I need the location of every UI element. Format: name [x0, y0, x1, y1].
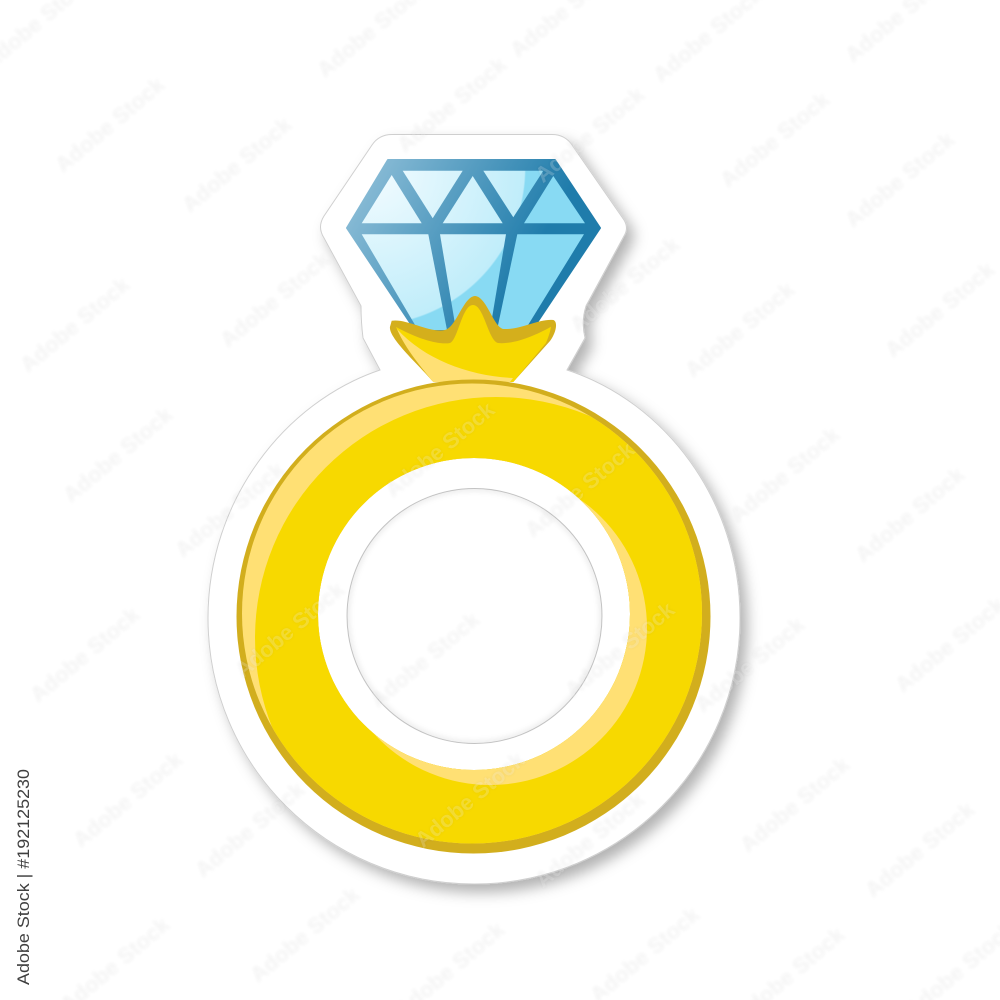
watermarks: Adobe Stock [850, 462, 969, 567]
watermarks: Adobe Stock [170, 457, 289, 562]
diamond outline [347, 160, 600, 330]
watermarks: Adobe Stock [680, 277, 799, 382]
watermarks: Adobe Stock [715, 87, 834, 192]
watermarks: Adobe Stock [15, 272, 134, 377]
watermarks: Adobe Stock [190, 777, 309, 882]
gold ring band [236, 380, 710, 854]
watermarks: Adobe Stock [410, 747, 529, 852]
sticker hole [347, 488, 602, 744]
watermarks: Adobe Stock [68, 747, 187, 852]
watermarks: Adobe Stock [215, 247, 334, 352]
crown outline [390, 296, 556, 382]
watermarks: Adobe Stock [840, 127, 959, 232]
watermarks: Adobe Stock [530, 787, 649, 892]
watermarks: Adobe Stock [560, 597, 679, 702]
watermarks: Adobe Stock [690, 612, 809, 717]
watermarks: Adobe Stock [245, 882, 364, 987]
watermarks: Adobe Stock [725, 422, 844, 527]
crown highlight [397, 329, 513, 382]
band border [236, 380, 710, 854]
watermarks: Adobe Stock [25, 602, 144, 707]
crown face [396, 305, 551, 382]
watermarks: Adobe Stock [380, 397, 499, 502]
watermarks: Adobe Stock [392, 52, 511, 157]
diamond facets [362, 171, 585, 330]
watermarks: Adobe Stock [735, 752, 854, 857]
watermarks: Adobe Stock [177, 112, 296, 217]
watermarks: Adobe Stock [565, 232, 684, 337]
stock id caption: Adobe Stock | #192125230 [14, 769, 33, 985]
band inner highlight [374, 499, 647, 785]
watermarks: Adobe Stock [530, 82, 649, 187]
watermarks: Adobe Stock [860, 797, 979, 902]
ring setting crown [390, 296, 556, 382]
watermarks: Adobe Stock [230, 577, 349, 682]
sticker backing [208, 134, 740, 884]
watermarks: Adobe Stock [880, 257, 999, 362]
band outer highlight [242, 384, 702, 844]
band face [255, 397, 702, 844]
diamond [347, 160, 600, 330]
watermarks: Adobe Stock [50, 72, 169, 177]
watermarks: Adobe Stock [365, 607, 484, 712]
watermarks: Adobe Stock [520, 437, 639, 542]
watermarks: Adobe Stock [58, 402, 177, 507]
illustration: diamond ring sticker [206, 134, 756, 900]
